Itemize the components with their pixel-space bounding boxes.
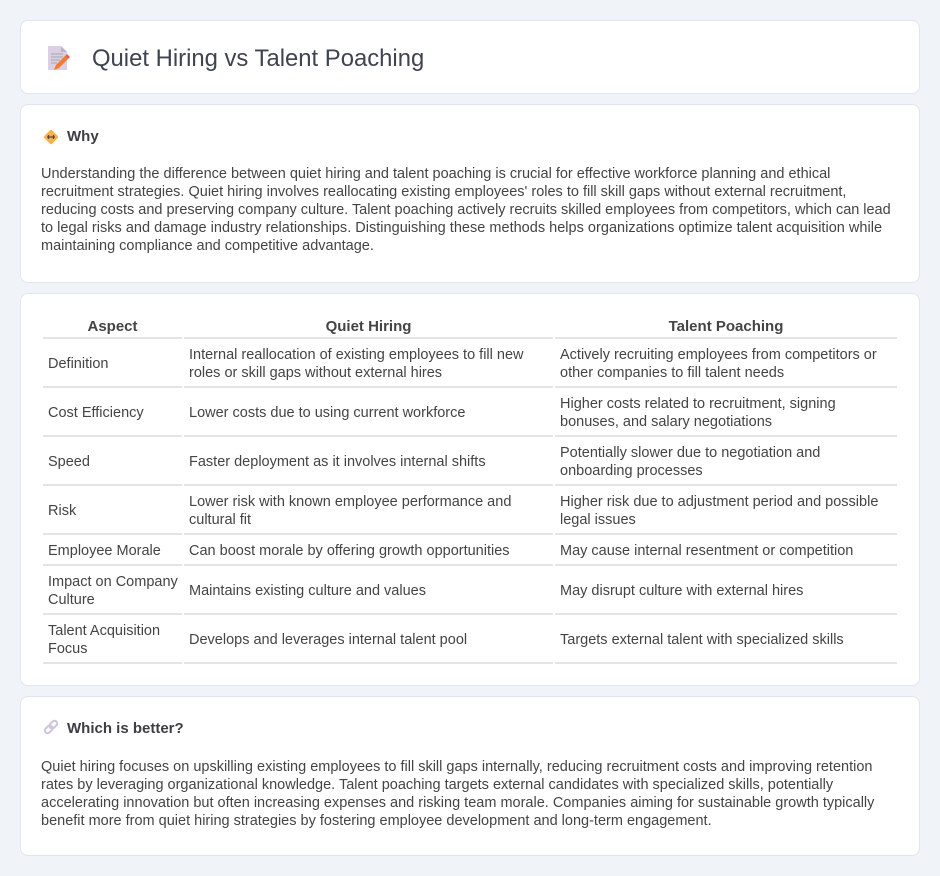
heading: why: Why: [67, 128, 99, 145]
text block: why paragraph: recruitment strategies. Quiet hiring involves reallocating existing employees' roles to fill skill gaps without external recruitment,: [41, 184, 846, 200]
row: risk: cultural fit: [189, 512, 251, 528]
heading: which is better: Which is better?: [67, 720, 184, 737]
panel: which is better: [20, 696, 920, 856]
row: risk: Lower risk with known employee performance and: [189, 494, 511, 510]
table header row: [87, 318, 783, 335]
row: talent acquisition focus: Develops and leverages internal talent pool: [189, 632, 467, 648]
text block: which is better paragraph: Quiet hiring focuses on upskilling existing employees to fill skill gaps internally, reducing recruitment costs and improving retention: [41, 759, 872, 775]
row: talent acquisition focus: Targets external talent with specialized skills: [560, 632, 844, 648]
title: Quiet Hiring vs Talent Poaching: [92, 45, 424, 72]
row: risk: Higher risk due to adjustment period and possible: [560, 494, 878, 510]
row: risk: legal issues: [560, 512, 636, 528]
text block: which is better paragraph: accelerating innovation but often increasing expenses and risking team morale. Companies aiming for sustainable growth typically: [41, 795, 874, 811]
row: risk: [48, 494, 878, 528]
row: impact on company culture: Maintains existing culture and values: [189, 583, 426, 599]
row: impact on company culture: Impact on Company: [48, 574, 178, 590]
text block: why paragraph: to legal risks and damage industry relationships. Distinguishing these methods helps organizations optimize talent acquisition while: [41, 220, 882, 236]
row: definition: Actively recruiting employees from competitors or: [560, 347, 877, 363]
table header row: Aspect: [87, 318, 138, 335]
row: talent acquisition focus: [48, 623, 844, 657]
row: speed: Speed: [48, 454, 90, 470]
row: cost efficiency: [48, 396, 836, 430]
row: talent acquisition focus: Talent Acquisition: [48, 623, 160, 639]
text block: why paragraph: Understanding the difference between quiet hiring and talent poaching is crucial for effective workforce planning and ethical: [41, 166, 830, 182]
text block: which is better paragraph: benefit more from quiet hiring strategies by fostering employee development and long-term engagement.: [41, 813, 712, 829]
row: speed: Potentially slower due to negotiation and: [560, 445, 820, 461]
row: speed: [48, 445, 820, 479]
icon: link: [44, 720, 58, 734]
row: definition: Definition: [48, 356, 108, 372]
row: impact on company culture: May disrupt culture with external hires: [560, 583, 803, 599]
text block: why paragraph: reducing costs and preserving company culture. Talent poaching actively recruits skilled employees from competitors, which can lead: [41, 202, 891, 218]
row: cost efficiency: bonuses, and salary negotiations: [560, 414, 772, 430]
row: talent acquisition focus: Focus: [48, 641, 88, 657]
text block: which is better paragraph: rates by leveraging organizational knowledge. Talent poaching targets external candidates with specialized skills, potentially: [41, 777, 833, 793]
row: definition: [48, 347, 877, 381]
row: employee morale: Can boost morale by offering growth opportunities: [189, 543, 510, 559]
row: employee morale: [48, 543, 853, 559]
row: impact on company culture: Culture: [48, 592, 95, 608]
row: cost efficiency: Higher costs related to recruitment, signing: [560, 396, 836, 412]
icon: diamond road sign: [44, 130, 58, 144]
icon: document with pencil: [48, 46, 70, 70]
row: definition: Internal reallocation of existing employees to fill new: [189, 347, 523, 363]
row: definition: other companies to fill talent needs: [560, 365, 784, 381]
table header row: Quiet Hiring: [326, 318, 411, 335]
row: speed: onboarding processes: [560, 463, 703, 479]
text block: why paragraph: maintaining compliance and competitive advantage.: [41, 238, 374, 254]
row: employee morale: Employee Morale: [48, 543, 161, 559]
panel: comparison table: [20, 293, 920, 686]
row: definition: roles or skill gaps without external hires: [189, 365, 442, 381]
row: employee morale: May cause internal resentment or competition: [560, 543, 853, 559]
row: impact on company culture: [48, 574, 803, 608]
row: risk: Risk: [48, 503, 76, 519]
text block: why paragraph: [41, 166, 891, 254]
row: speed: Faster deployment as it involves internal shifts: [189, 454, 486, 470]
text block: which is better paragraph: [41, 759, 874, 829]
row: cost efficiency: Cost Efficiency: [48, 405, 144, 421]
panel: why: [20, 104, 920, 283]
table header row: Talent Poaching: [669, 318, 783, 335]
panel: title card: [20, 20, 920, 94]
row: cost efficiency: Lower costs due to using current workforce: [189, 405, 465, 421]
